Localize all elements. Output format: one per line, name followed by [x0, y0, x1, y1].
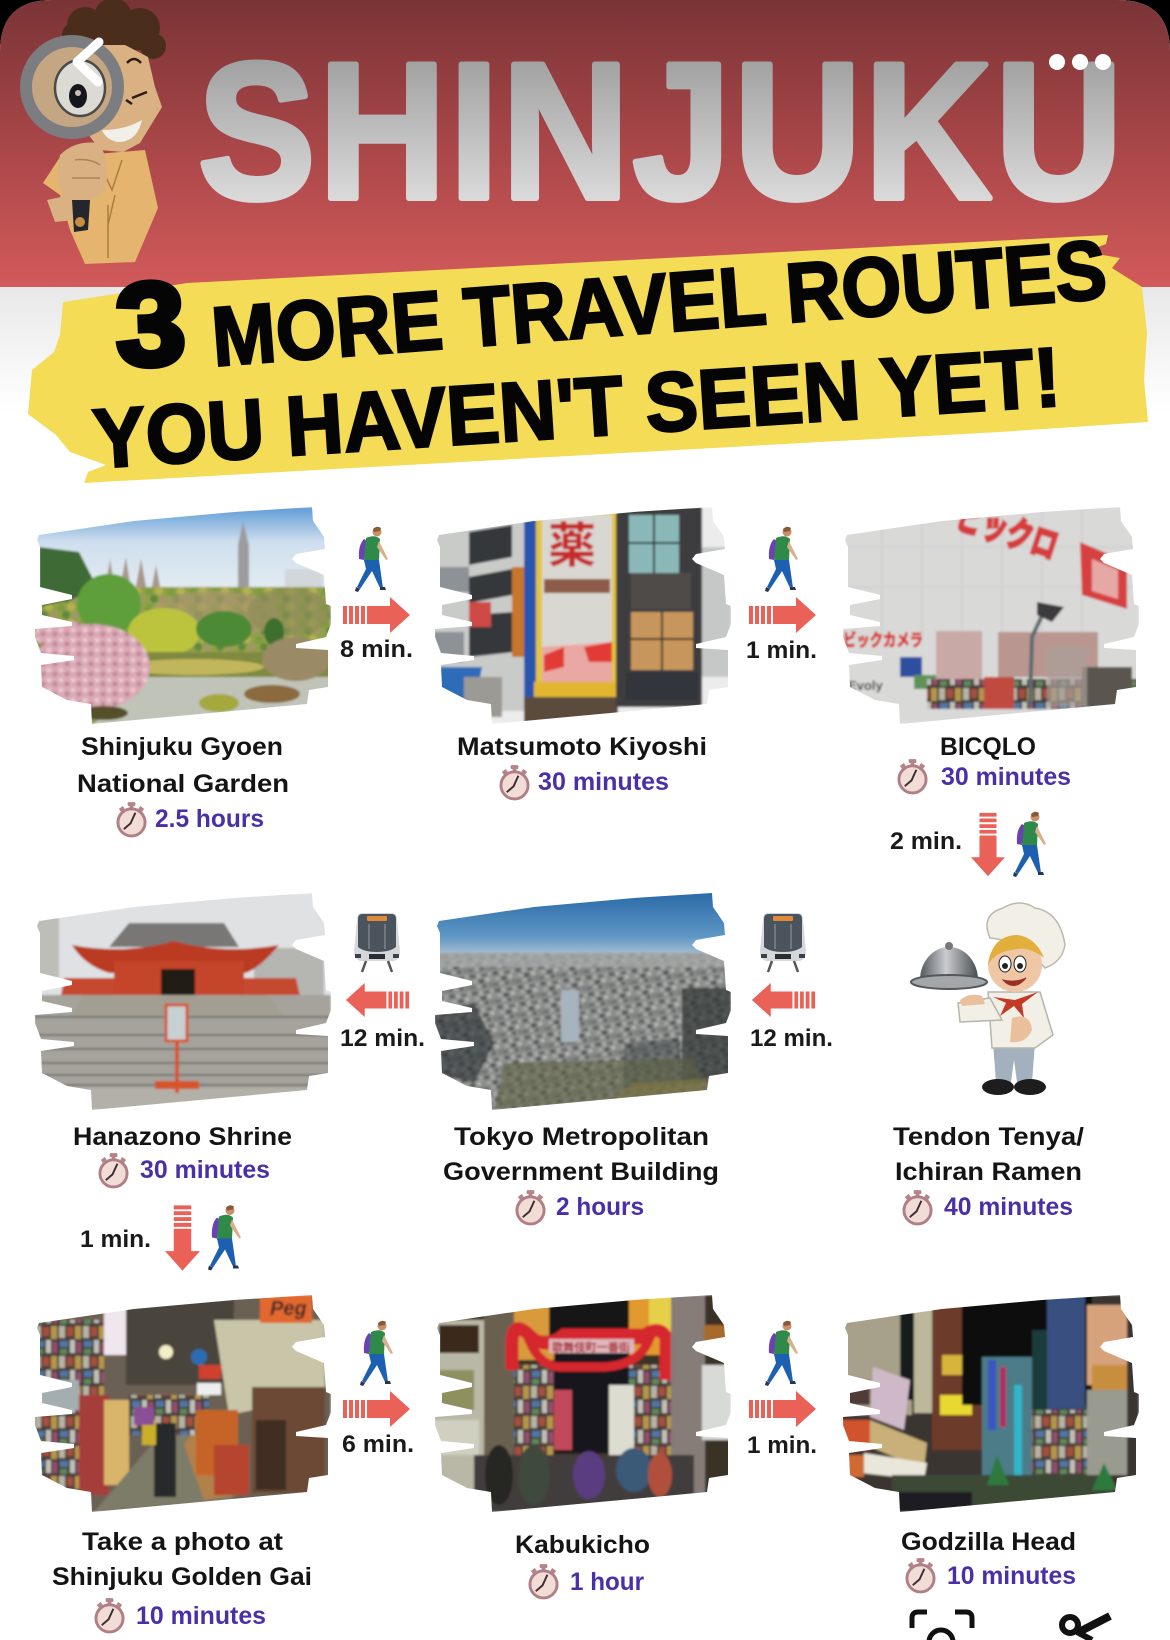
label: Matsumoto Kiyoshi: 30 minutes [538, 768, 669, 796]
connector: 12 min train left [340, 913, 425, 1052]
label: Tendon Tenya / Ichiran Ramen: Ichiran Ramen [895, 1158, 1082, 1186]
connector: 1 min walk down: 1 min. [80, 1226, 151, 1253]
label: Kabukicho [515, 1531, 650, 1598]
subtitle line 2: YOU HAVEN'T SEEN YET! [90, 330, 1063, 486]
label: Kabukicho: 1 hour [570, 1568, 644, 1596]
photo: BICQLO building [842, 496, 1139, 724]
label: Hanazono Shrine: Hanazono Shrine [73, 1123, 292, 1151]
label: Hanazono Shrine [73, 1123, 292, 1187]
label: Godzilla Head: Godzilla Head [901, 1528, 1076, 1556]
label: Tokyo Metropolitan Government Building: 2 hours [556, 1193, 644, 1221]
label: Tendon Tenya / Ichiran Ramen: Tendon Tenya/ [893, 1123, 1084, 1151]
mascot: man with magnifying glass [26, 0, 166, 264]
label: Take a photo at Shinjuku Golden Gai: Shinjuku Golden Gai [52, 1563, 312, 1591]
label: Take a photo at Shinjuku Golden Gai [52, 1528, 312, 1632]
menu dots [1049, 54, 1111, 70]
label: Matsumoto Kiyoshi: Matsumoto Kiyoshi [457, 733, 707, 761]
connector: 1 min walk down [80, 1205, 241, 1271]
label: Tokyo Metropolitan Government Building [443, 1123, 719, 1224]
big numeral 3: 3 [113, 258, 188, 392]
photo: Shinjuku Golden Gai alley [34, 1295, 331, 1512]
back chevron [77, 42, 99, 82]
label: Shinjuku Gyoen: National Garden [77, 770, 289, 798]
connector: 6 min walk: 6 min. [342, 1431, 414, 1458]
connector: 8 min walk: 8 min. [340, 636, 413, 663]
photo: BICQLO building: ビックカメラ [843, 630, 923, 650]
subtitle line 1: MORE TRAVEL ROUTES [208, 222, 1110, 384]
connector: 1 min walk: 1 min. [746, 637, 817, 664]
label: Take a photo at Shinjuku Golden Gai: Take a photo at [82, 1528, 284, 1556]
photo: Kabukicho gate: 歌舞伎町一番街 [552, 1340, 630, 1354]
photo: Matsumoto Kiyoshi storefront: 薬 [548, 520, 596, 573]
label: Tokyo Metropolitan Government Building: Government Building [443, 1158, 719, 1186]
connector: 1 min walk: 1 min. [747, 1432, 817, 1459]
label: Hanazono Shrine: 30 minutes [140, 1156, 270, 1184]
label: BICQLO: BICQLO [940, 733, 1036, 761]
photo: Shinjuku Gyoen garden [34, 507, 331, 724]
photo: BICQLO building: Evoly [848, 678, 883, 693]
photo: Hanazono Shrine [34, 893, 331, 1110]
photo: Matsumoto Kiyoshi storefront [434, 507, 731, 724]
photo: Godzilla Head street [842, 1295, 1139, 1512]
photo: Shinjuku Golden Gai alley: Peg [270, 1298, 307, 1320]
connector: 8 min walk [340, 527, 413, 663]
label: BICQLO [899, 733, 1071, 793]
connector: 2 min walk down [890, 812, 1046, 877]
label: Tendon Tenya / Ichiran Ramen: 40 minutes [944, 1193, 1073, 1221]
subtitle banner [28, 222, 1148, 486]
label: Tendon Tenya / Ichiran Ramen [893, 1123, 1084, 1224]
photo: BICQLO building: ビックロ [952, 496, 1063, 567]
label: Matsumoto Kiyoshi [457, 733, 707, 799]
connector: 12 min train left: 12 min. [340, 1025, 425, 1052]
connector: 2 min walk down: 2 min. [890, 828, 962, 855]
icon: image search overlay [912, 1612, 972, 1640]
label: Godzilla Head [901, 1528, 1076, 1592]
label: Shinjuku Gyoen: Shinjuku Gyoen [81, 733, 283, 761]
label: Godzilla Head: 10 minutes [947, 1562, 1076, 1590]
label: Shinjuku Gyoen: 2.5 hours [155, 805, 264, 833]
connector: 12 min train left: 12 min. [750, 1025, 833, 1052]
connector: 12 min train left [750, 913, 833, 1052]
label: Kabukicho: Kabukicho [515, 1531, 650, 1559]
connector: 1 min walk [746, 527, 817, 664]
photo: Tokyo Metropolitan Government view [434, 893, 731, 1110]
illustration: chef holding cloche [911, 903, 1065, 1095]
icon: scissors overlay [1062, 1616, 1110, 1640]
label: BICQLO: 30 minutes [941, 763, 1071, 791]
connector: 1 min walk [747, 1321, 817, 1459]
photo: Kabukicho gate [434, 1295, 731, 1512]
connector: 6 min walk [342, 1321, 414, 1458]
label: Tokyo Metropolitan Government Building: Tokyo Metropolitan [454, 1123, 709, 1151]
label: Take a photo at Shinjuku Golden Gai: 10 minutes [136, 1602, 266, 1630]
label: Shinjuku Gyoen [77, 733, 289, 836]
